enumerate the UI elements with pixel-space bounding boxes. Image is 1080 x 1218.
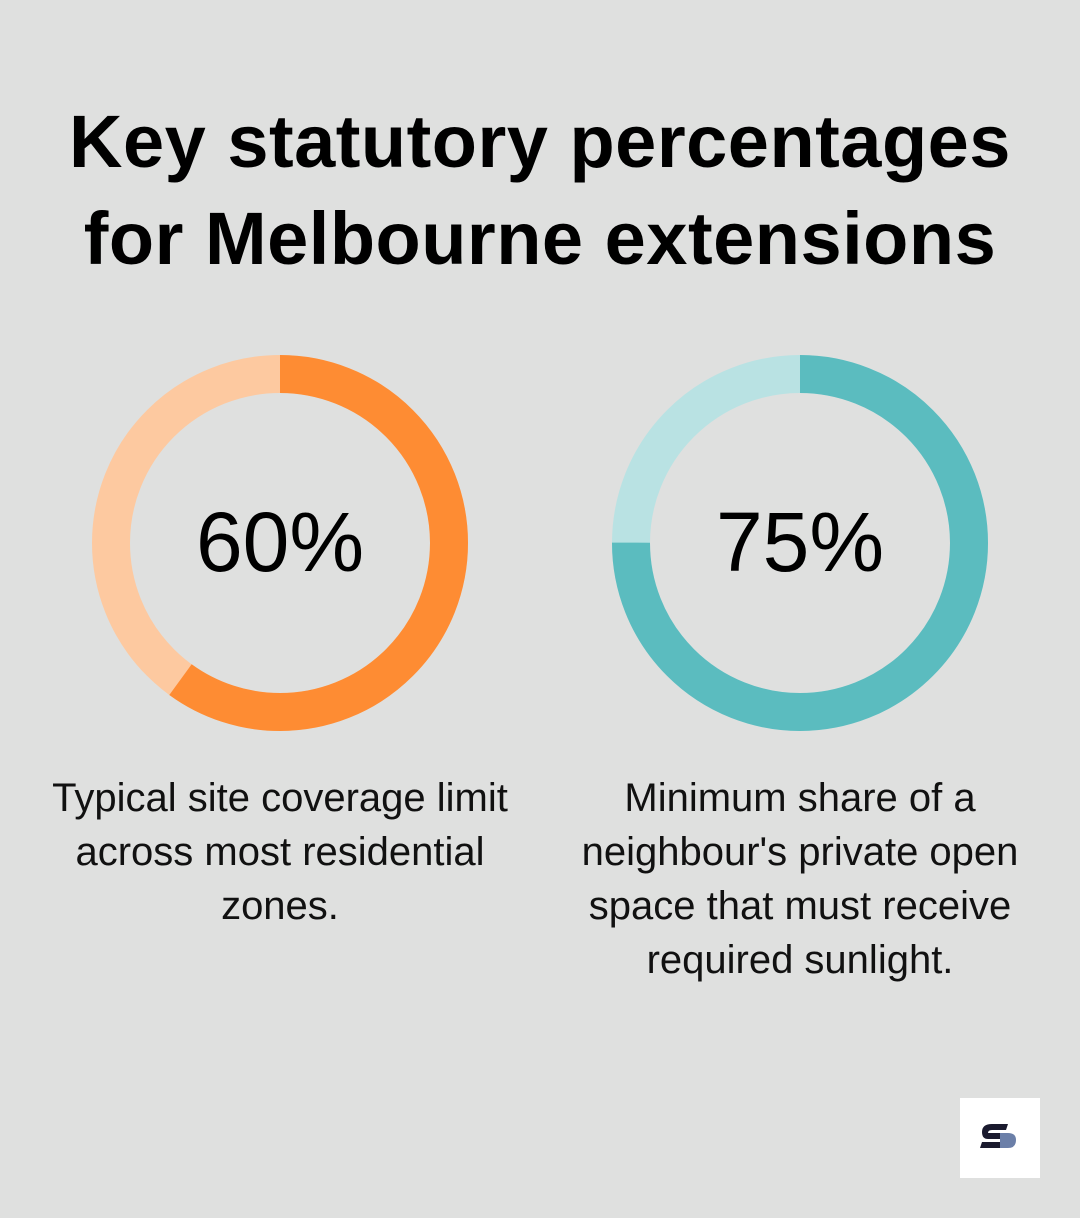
title: Key statutory percentages xyxy=(69,100,1011,183)
title: for Melbourne extensions xyxy=(84,197,996,280)
donut chart: 60% xyxy=(92,355,468,731)
donut chart: 75%: 75% xyxy=(716,495,884,589)
donut chart: 75% xyxy=(612,355,988,731)
logo xyxy=(960,1098,1040,1178)
donut chart: 60%: 60% xyxy=(196,495,364,589)
description: 60%: Typical site coverage limit across most residential zones. xyxy=(52,776,508,928)
description: 75%: Minimum share of a neighbour's private open space that must receive required sunlight. xyxy=(582,776,1018,982)
title xyxy=(69,100,1011,280)
